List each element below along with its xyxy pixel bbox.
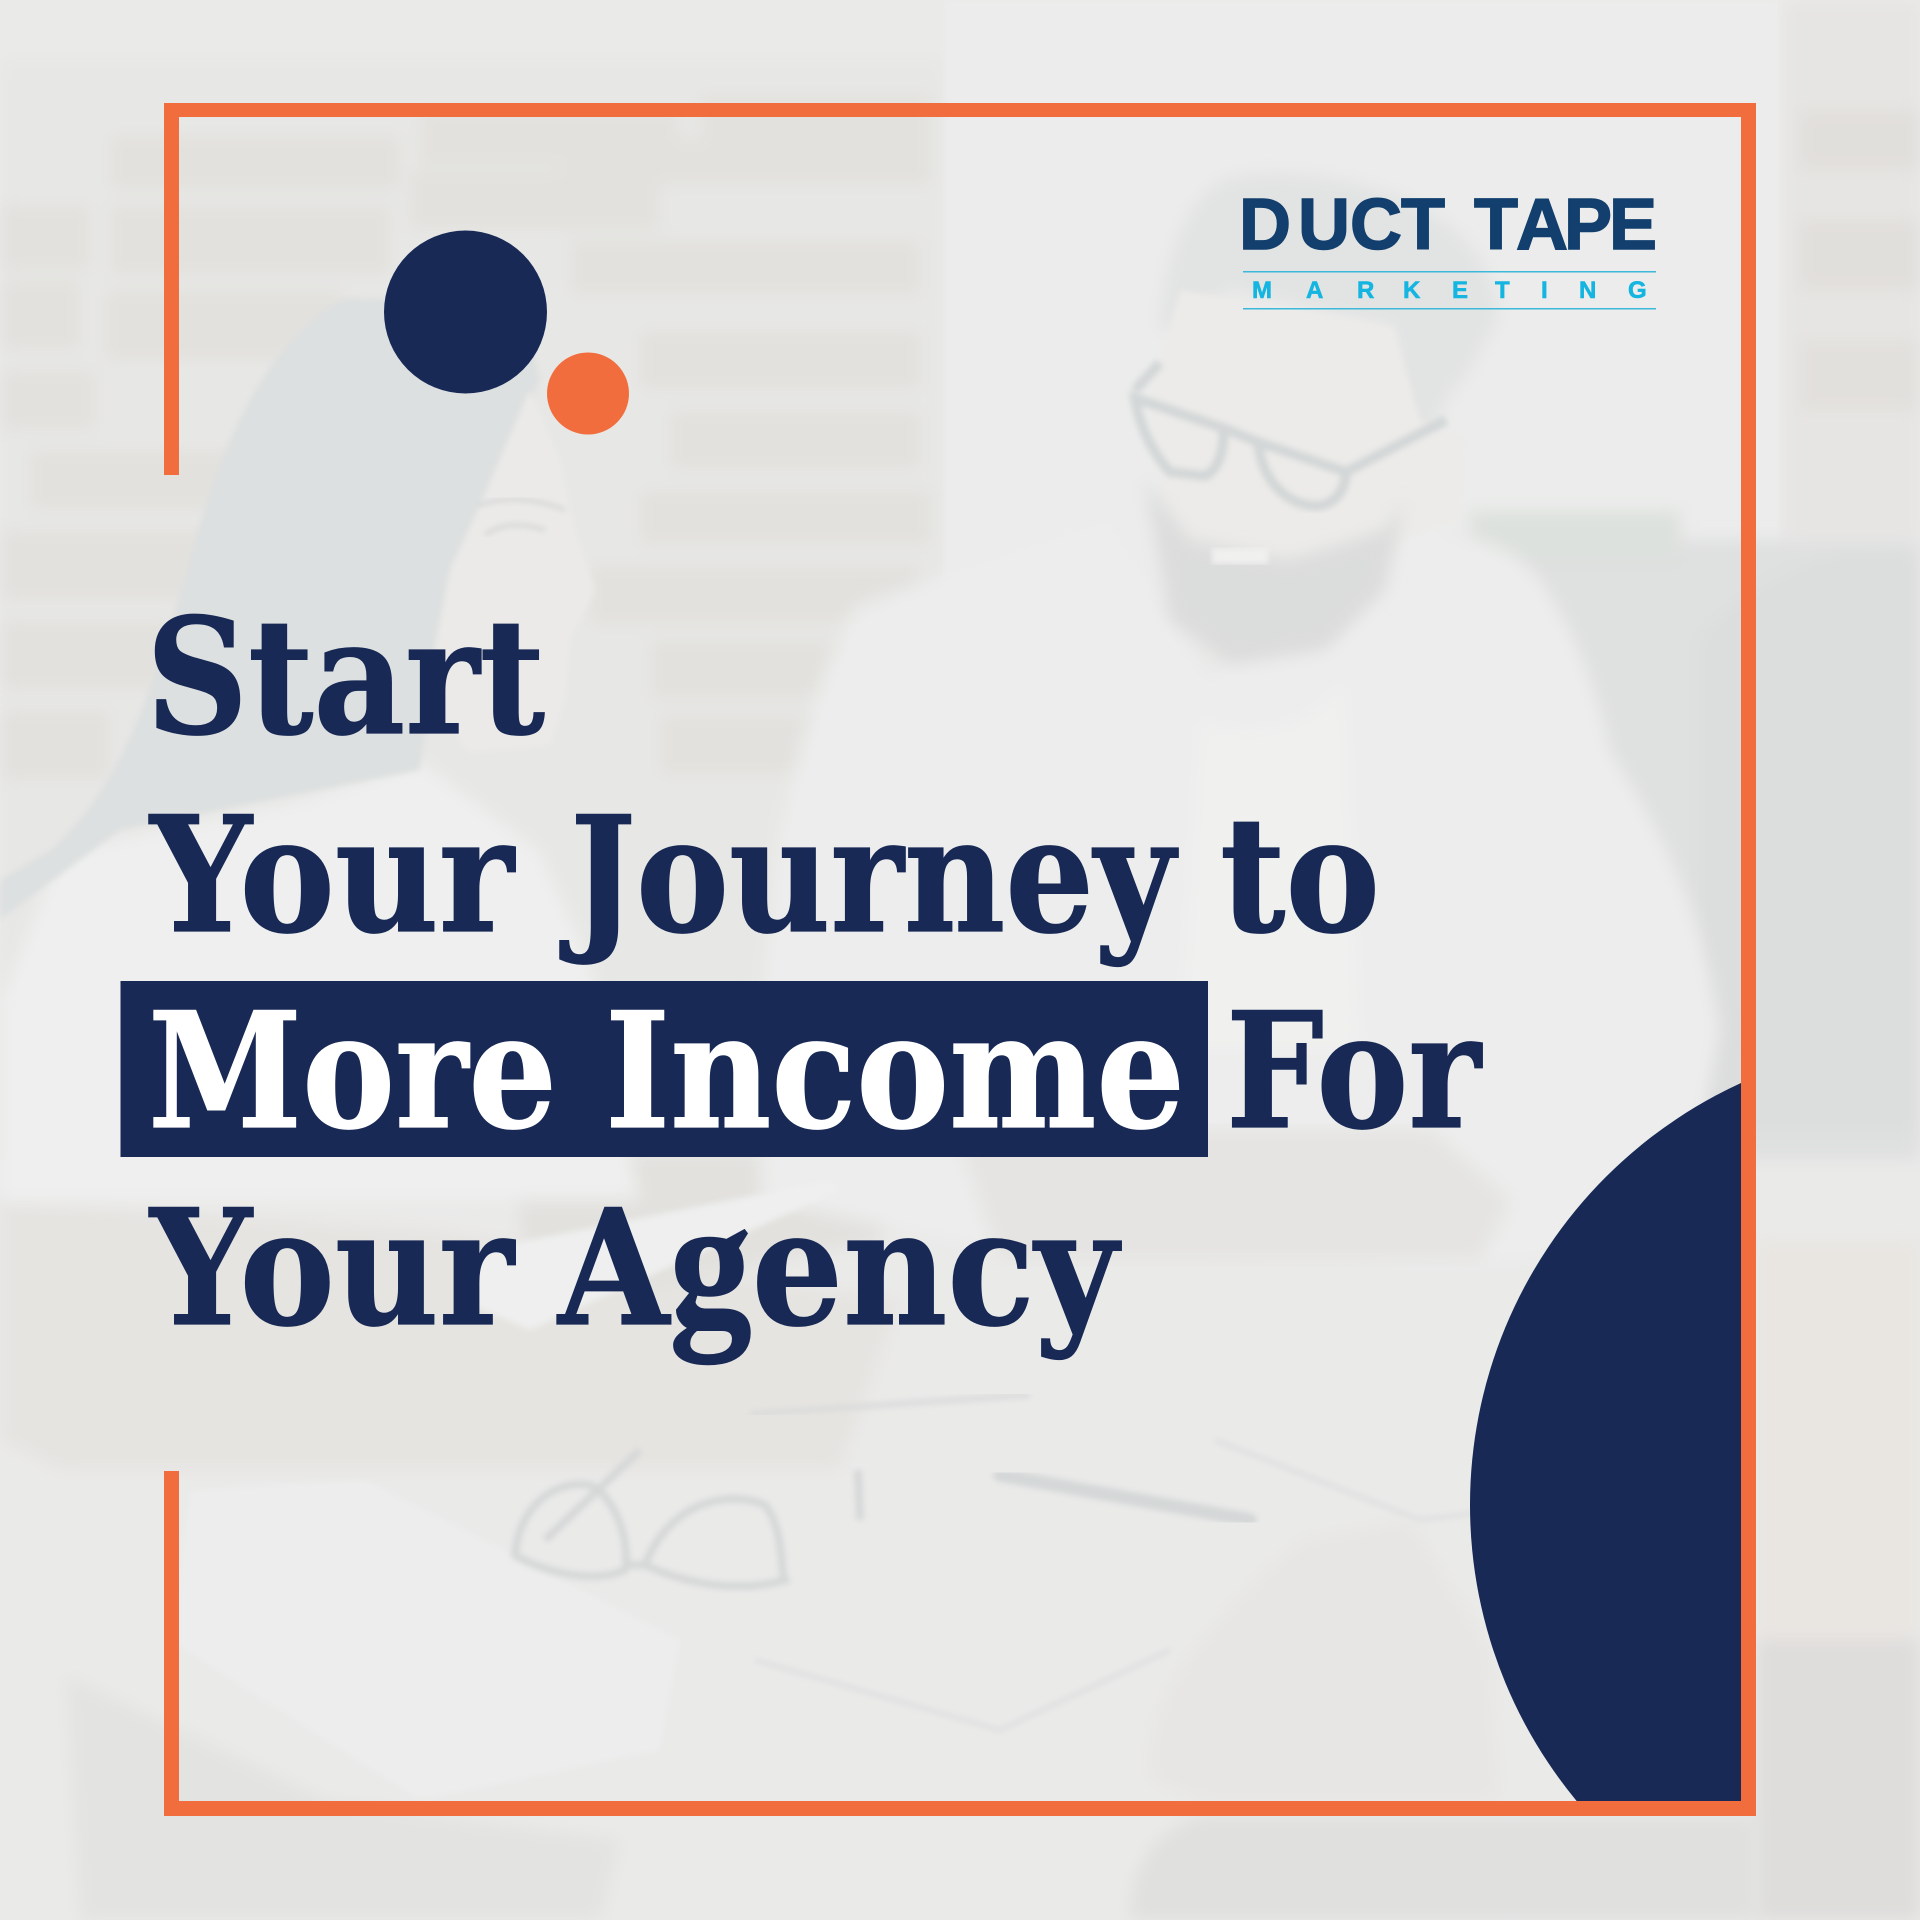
woman shirt <box>0 760 640 1200</box>
wall, right <box>945 0 1780 600</box>
pen on table <box>1000 1475 1250 1520</box>
tablet <box>460 1180 840 1330</box>
man glasses <box>1135 363 1446 506</box>
headline <box>120 583 1482 1365</box>
logo wordmark: DUCT TAPE <box>1239 185 1657 265</box>
big navy circle clipped by frame <box>1470 1083 1741 1801</box>
headline line 4: Agency <box>556 1160 1122 1365</box>
bottom left dark wedge <box>67 1676 620 1920</box>
table area <box>0 1160 1500 1920</box>
logo rule top <box>1243 271 1656 272</box>
navy circle <box>384 230 547 394</box>
highlighted words: Income <box>605 977 1185 1165</box>
headline line 1: Start <box>146 583 545 771</box>
man t-shirt <box>1180 680 1360 1050</box>
laptop shadow under highlight bar <box>520 1155 900 1290</box>
brick column, far right <box>1785 0 1920 540</box>
pen 1 <box>750 1395 1030 1414</box>
table eyeglasses <box>515 1450 860 1586</box>
paper lines on table <box>755 1440 1500 1730</box>
headline line 2 <box>148 781 1380 969</box>
headline line 2: Journey <box>560 781 1179 969</box>
headline line 4: Your <box>148 1174 516 1362</box>
orange frame <box>164 103 1756 1816</box>
logo: Duct Tape Marketing <box>1239 185 1657 310</box>
headline line 2: to <box>1220 781 1380 969</box>
highlighted words <box>148 977 1185 1165</box>
highlight bar <box>120 981 1208 1157</box>
headline line 4 <box>148 1160 1122 1365</box>
highlighted words: More <box>148 977 557 1165</box>
man hand and sleeve <box>960 1130 1510 1260</box>
woman hair <box>0 298 540 920</box>
woman face <box>425 390 595 752</box>
hand and wrist bottom <box>1149 1520 1500 1800</box>
woman eye <box>478 500 565 535</box>
hands and papers <box>170 1480 680 1800</box>
man head <box>1135 174 1498 665</box>
logo rule bottom <box>1243 308 1656 310</box>
logo subline: MARKETING <box>1252 277 1647 304</box>
man jacket <box>760 520 1720 1262</box>
orange circle <box>547 352 629 434</box>
lower right dark <box>1130 1816 1756 1920</box>
word: For: For <box>1226 977 1482 1165</box>
brick wall, left <box>0 60 945 1160</box>
forearm and wooden table band, left <box>0 1200 900 1470</box>
dark background behind man <box>1440 512 1920 1920</box>
headline line 2: Your <box>148 781 516 969</box>
